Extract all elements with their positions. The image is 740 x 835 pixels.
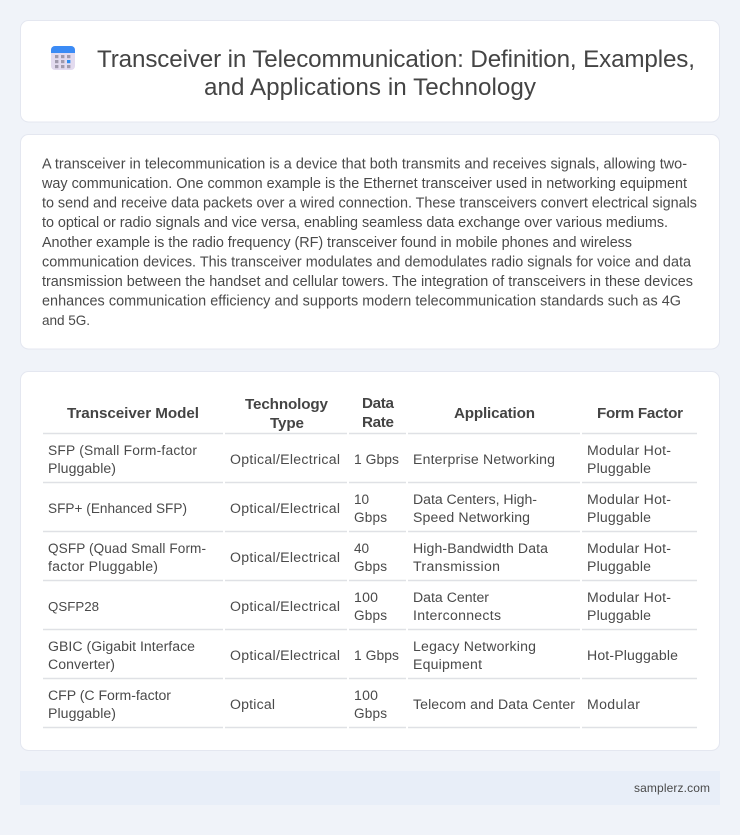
table row: QSFP28: Modular Hot- xyxy=(587,589,671,605)
table row: QSFP28: Optical/Electrical xyxy=(230,598,340,614)
table header row xyxy=(67,395,683,432)
table row: CFP: Modular xyxy=(587,696,640,712)
table row: SFP: Pluggable) xyxy=(48,460,116,476)
table row: SFP+: Data Centers, High- xyxy=(413,491,537,507)
table row: QSFP: High-Bandwidth Data xyxy=(413,540,548,556)
text block: description: transmission between the handset and cellular towers. The integration of transceivers in these devices xyxy=(42,274,693,290)
table header row: Transceiver Model xyxy=(67,405,199,422)
text block: description: to optical or radio signals and vice versa, enabling seamless data exchange over various mediums. xyxy=(42,215,668,231)
table row: CFP: Gbps xyxy=(354,706,387,721)
table header row: Rate xyxy=(362,414,394,431)
table row: SFP+: Pluggable xyxy=(587,509,651,525)
table row: QSFP: Modular Hot- xyxy=(587,540,671,556)
table header row: Application xyxy=(454,405,535,422)
table row: SFP+: SFP+ (Enhanced SFP) xyxy=(48,501,187,516)
table row: SFP: SFP (Small Form-factor xyxy=(48,443,197,458)
table row: GBIC xyxy=(48,638,678,672)
table row: QSFP: Gbps xyxy=(354,559,387,574)
table row: QSFP xyxy=(48,540,671,574)
table row: CFP: 100 xyxy=(354,687,378,703)
panel: intro paragraph xyxy=(20,134,720,349)
table header row: Form Factor xyxy=(597,405,683,422)
table row: SFP: Pluggable xyxy=(587,460,651,476)
table row: CFP: Pluggable) xyxy=(48,705,116,721)
table row: SFP+: Speed Networking xyxy=(413,509,530,525)
table row: QSFP28: QSFP28 xyxy=(48,599,99,614)
table row: GBIC: GBIC (Gigabit Interface xyxy=(48,638,195,654)
table row: QSFP28: Pluggable xyxy=(587,607,651,623)
table row: SFP+: Optical/Electrical xyxy=(230,500,340,516)
table row: SFP+: Gbps xyxy=(354,510,387,525)
table row: GBIC: Equipment xyxy=(413,656,482,672)
title: Transceiver in Telecommunication: Definition, Examples, xyxy=(97,46,695,73)
text block: description: communication devices. This transceiver modulates and demodulates radio signals for voice and data xyxy=(42,254,691,270)
table row: SFP+: Modular Hot- xyxy=(587,491,671,507)
table row: SFP+: 10 xyxy=(354,492,369,507)
table row: SFP: Enterprise Networking xyxy=(413,451,555,467)
table row: SFP xyxy=(48,442,671,476)
text block: description: Another example is the radio frequency (RF) transceiver found in mobile phones and wireless xyxy=(42,235,632,251)
table row: CFP: CFP (C Form-factor xyxy=(48,687,171,703)
table row: CFP: Telecom and Data Center xyxy=(413,696,575,712)
table row: QSFP28: Gbps xyxy=(354,608,387,623)
icon: calendar grid xyxy=(51,46,75,70)
table header row: Technology xyxy=(245,396,329,413)
table header row: Data xyxy=(362,395,395,412)
text block: description xyxy=(41,156,697,328)
table row: QSFP: Optical/Electrical xyxy=(230,549,340,565)
text block: description: A transceiver in telecommunication is a device that both transmits and receives signals, allowing two- xyxy=(42,156,687,172)
panel: comparison table xyxy=(20,372,720,750)
text block: description: to send and receive data packets over a wired connection. These transceivers convert electrical signals xyxy=(42,196,697,212)
panel: title header xyxy=(20,20,720,122)
table row: GBIC: Legacy Networking xyxy=(413,638,536,654)
table row: QSFP: Transmission xyxy=(413,558,500,574)
table row: SFP: 1 Gbps xyxy=(354,451,399,467)
table row: QSFP28: Interconnects xyxy=(413,607,501,623)
text block: description: way communication. One common example is the Ethernet transceiver used in networking equipment xyxy=(41,176,687,192)
text block: description: enhances communication efficiency and supports modern telecommunication standards such as 4G xyxy=(42,294,681,310)
table row: GBIC: 1 Gbps xyxy=(354,647,399,663)
table row: QSFP28: 100 xyxy=(354,589,378,605)
table row: QSFP: factor Pluggable) xyxy=(48,558,158,574)
table header row: Type xyxy=(270,415,304,432)
table row: GBIC: Optical/Electrical xyxy=(230,647,340,663)
table row: GBIC: Converter) xyxy=(48,656,115,672)
table row: GBIC: Hot-Pluggable xyxy=(587,647,678,663)
table row: QSFP: Pluggable xyxy=(587,558,651,574)
footer source text: samplerz.com xyxy=(634,781,710,795)
table row: QSFP28 xyxy=(48,589,671,623)
table row: CFP: Optical xyxy=(230,696,275,712)
table row: QSFP28: Data Center xyxy=(413,589,489,605)
table row: QSFP: QSFP (Quad Small Form- xyxy=(48,541,206,556)
footer bar xyxy=(20,771,720,805)
table row: QSFP: 40 xyxy=(354,541,369,556)
title xyxy=(97,46,695,101)
table row: SFP: Optical/Electrical xyxy=(230,451,340,467)
text block: description: and 5G. xyxy=(42,313,90,328)
table row: CFP xyxy=(48,687,640,721)
table row: SFP+ xyxy=(48,491,671,525)
title: and Applications in Technology xyxy=(204,74,537,101)
table row: SFP: Modular Hot- xyxy=(587,442,671,458)
